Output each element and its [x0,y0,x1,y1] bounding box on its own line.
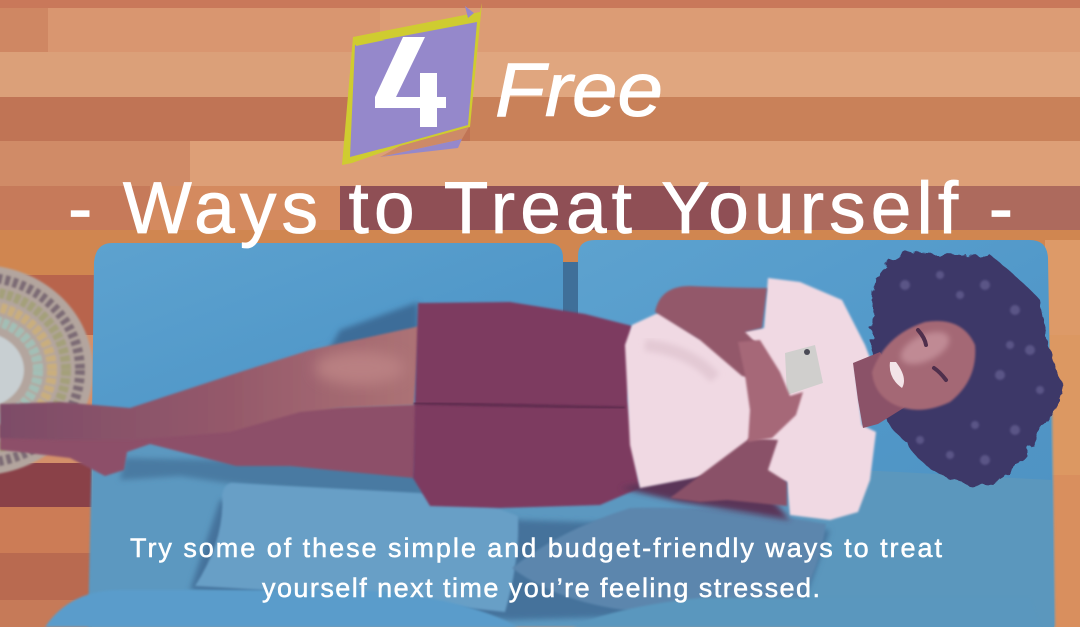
lower leg and foot [0,404,418,478]
person relaxing on sofa [0,252,1062,520]
shirt shadow [645,345,715,378]
phone [785,345,823,395]
right pillow [512,508,826,613]
sofa [45,240,1055,627]
hands [738,340,803,442]
face [872,321,975,410]
left pillow [195,483,518,612]
face highlight [896,325,954,371]
shadow under torso [620,462,790,520]
smile [890,362,904,388]
subtitle text [130,533,942,603]
left back cushion [92,243,563,420]
gap between back cushions [556,262,584,362]
lower right seat cushion [790,470,1054,627]
sofa base [88,400,1055,627]
upper leg and foot [0,326,420,440]
yellow inner tick [355,38,385,46]
subtitle text: Try some of these simple and budget-friendly ways to treat [130,533,942,563]
bottom right cushion [572,598,1040,627]
heading: Free: Free [495,48,663,133]
purple sliver [380,139,462,157]
shadow below legs [120,458,425,505]
shorts fold [414,403,625,408]
shorts [413,302,640,508]
shadow around pillows [190,500,830,620]
subtitle text: yourself next time you’re feeling stressed. [262,573,820,603]
logo: number 4 badge [342,3,482,165]
heading: Ways to Treat Yourself: - Ways to Treat Yourself - [68,168,1013,249]
upper arm [655,286,767,378]
hair curls [900,271,1044,465]
woven basket [0,265,93,475]
numeral 4 [375,37,446,127]
purple square [350,22,477,157]
eyes [918,330,946,380]
neck [853,352,910,428]
wood gap under square [380,127,469,157]
purple arrow tip [465,6,474,18]
right back cushion [578,240,1052,490]
bottom left cushion [45,590,518,627]
hair [870,252,1062,485]
yellow-green frame [342,3,482,165]
shadow above thigh [320,302,418,365]
knee highlight [315,351,405,385]
t-shirt [625,278,876,520]
lower arm [670,438,787,506]
